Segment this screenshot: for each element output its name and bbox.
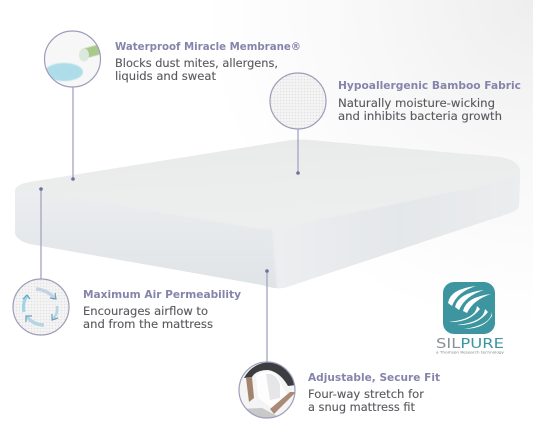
connector line [40,189,42,279]
panel: secure fit: a snug mattress fit [308,400,415,414]
panel: waterproof membrane [44,31,301,181]
icon: hands stretching cover [239,362,296,420]
panel: waterproof membrane: liquids and sweat [115,69,216,83]
panel: bamboo fabric: and inhibits bacteria growth [338,109,502,123]
description: Encourages airflow to [83,304,208,318]
panel: air permeability: and from the mattress [83,317,213,331]
icon: fabric weave [270,73,326,129]
description: Naturally moisture-wicking [338,96,495,110]
connector line [297,129,299,173]
logo wordmark: SIL PURE [436,337,504,352]
logo: Silpure [436,282,504,354]
mattress side panel [272,160,525,295]
icon: airflow arrows [13,279,69,335]
icon: logo mark [443,282,495,334]
mattress [10,135,525,295]
heading: Hypoallergenic Bamboo Fabric [338,79,521,92]
description: Four-way stretch for [308,387,424,401]
logo tagline: a Thomson Research technology [436,350,504,354]
heading: Maximum Air Permeability [83,288,241,301]
mattress top surface [393,198,404,202]
connector line [266,271,268,362]
panel: bamboo fabric [270,73,521,175]
mattress front panel [108,258,275,288]
heading: Adjustable, Secure Fit [308,371,440,384]
connector line [72,87,74,179]
heading: Waterproof Miracle Membrane® [115,40,301,53]
panel: air permeability [13,187,241,335]
description: Blocks dust mites, allergens, [115,56,278,70]
icon: liquid drop on membrane [44,31,103,87]
panel: secure fit [239,269,440,420]
